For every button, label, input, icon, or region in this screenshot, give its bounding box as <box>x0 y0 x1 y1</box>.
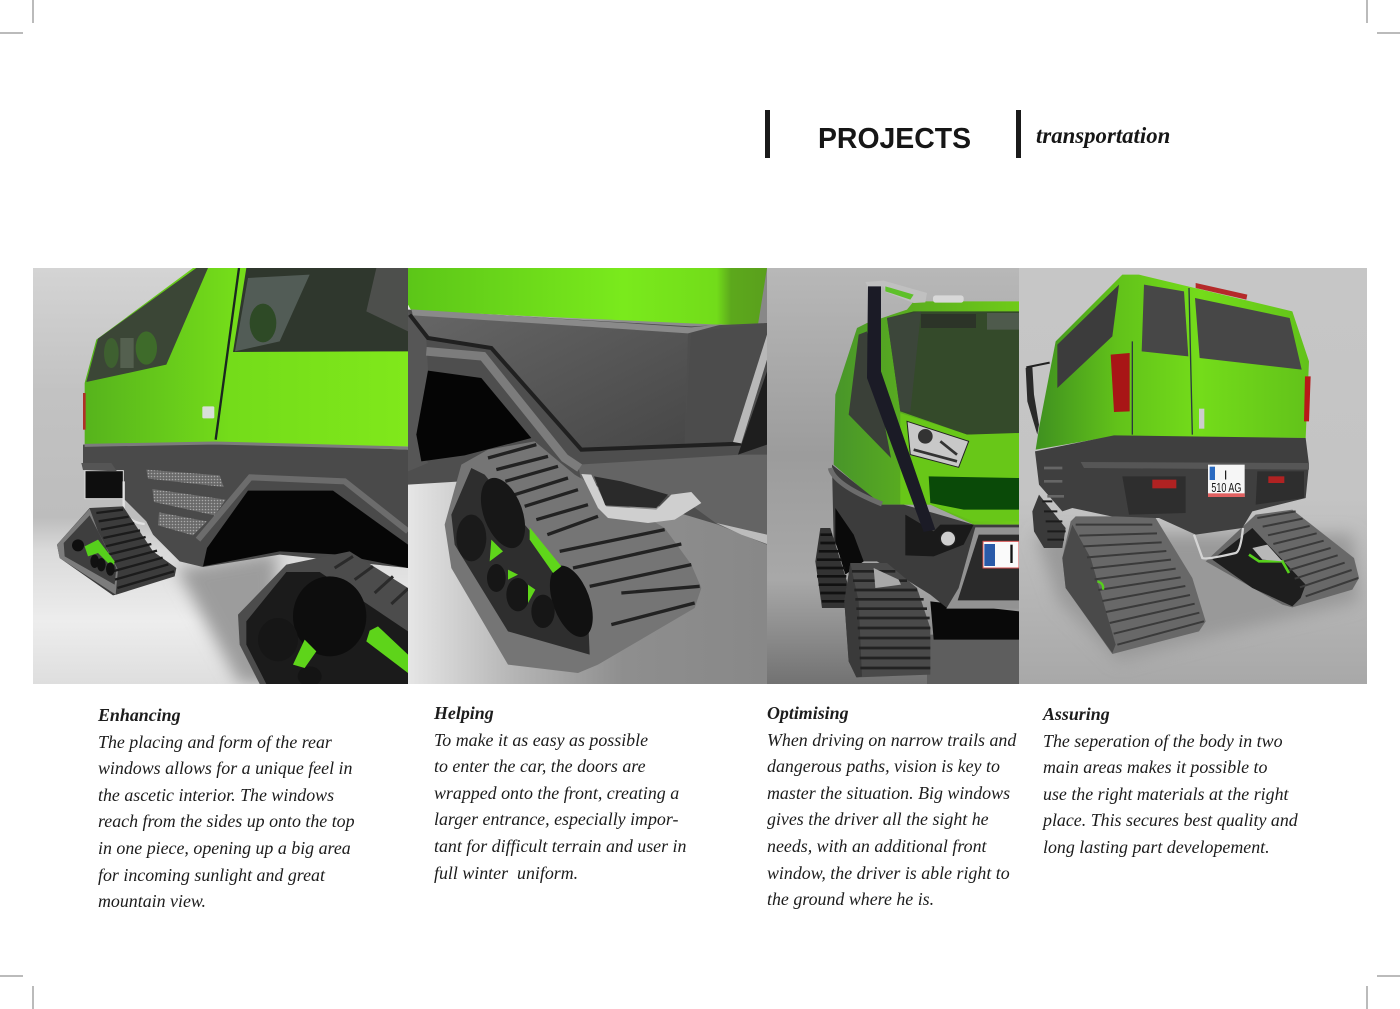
step handle <box>581 474 701 523</box>
side vents <box>146 470 226 535</box>
ground shadow <box>1036 535 1359 661</box>
photo: close-up of track and door step <box>408 268 767 684</box>
open door <box>1026 363 1050 435</box>
door window <box>233 268 408 352</box>
text block: Optimising: needs, with an additional front <box>767 836 986 856</box>
side window <box>849 331 891 458</box>
number plate with "510 AG": I <box>1224 468 1227 482</box>
text block: Optimising: When driving on narrow trails and <box>767 730 1016 750</box>
number plate with "510 AG": 510 AG <box>1211 481 1241 495</box>
licence plate frame <box>946 527 1019 609</box>
text block: Enhancing: in one piece, opening up a big area <box>98 838 351 858</box>
left track <box>1062 516 1206 654</box>
text block: Enhancing: the ascetic interior. The windows <box>98 785 334 805</box>
text block: Enhancing: mountain view. <box>98 891 206 911</box>
text block: Optimising: window, the driver is able right to <box>767 863 1010 883</box>
text block: Assuring: place. This secures best quality and <box>1043 810 1298 830</box>
text block: Optimising: Optimising <box>767 703 849 723</box>
rear track <box>57 506 176 595</box>
door seam <box>216 268 239 440</box>
green body <box>408 268 767 325</box>
grille opening <box>929 476 1019 510</box>
text block: Assuring: main areas makes it possible to <box>1043 757 1267 777</box>
far left track <box>1032 495 1066 548</box>
text block: Helping: wrapped onto the front, creating a <box>434 783 679 803</box>
windscreen <box>887 311 1019 435</box>
text block: Helping: larger entrance, especially impor- <box>434 809 678 829</box>
text block: Optimising: master the situation. Big windows <box>767 783 1010 803</box>
text block: Enhancing: The placing and form of the rear <box>98 732 332 752</box>
dark bumper <box>830 465 1019 608</box>
text block: Helping: tant for difficult terrain and user in <box>434 836 686 856</box>
text block: Enhancing: for incoming sunlight and great <box>98 865 325 885</box>
text block: Optimising: dangerous paths, vision is key to <box>767 756 1000 776</box>
wheel arch <box>416 371 531 461</box>
text block: Enhancing: Enhancing <box>98 705 181 725</box>
photo: front three-quarter view <box>767 268 1019 684</box>
front track <box>238 551 408 686</box>
text block: Helping: Helping <box>434 703 494 723</box>
text block: Optimising <box>767 703 1016 909</box>
headlight <box>907 421 969 467</box>
rear windows <box>86 268 208 382</box>
photo: rear view with open door <box>1019 268 1367 684</box>
snorkel <box>865 281 935 532</box>
text block: Enhancing: reach from the sides up onto the top <box>98 811 355 831</box>
text block: Assuring: Assuring <box>1043 704 1110 724</box>
photo: rear side view of tracked vehicle <box>33 268 408 686</box>
text block: Enhancing <box>98 705 355 911</box>
header bars <box>765 110 1021 158</box>
text block: Helping: to enter the car, the doors are <box>434 756 646 776</box>
dark lower body <box>83 442 408 568</box>
wheel arch <box>203 491 408 568</box>
text block: Helping <box>434 703 686 883</box>
dark body panel <box>408 309 767 545</box>
rear windows <box>1142 285 1302 370</box>
heading: transportation: transportation <box>1036 123 1170 148</box>
near track <box>844 563 930 677</box>
text block: Assuring: use the right materials at the right <box>1043 784 1288 804</box>
text block: Helping: full winter uniform. <box>434 863 578 883</box>
text block: Optimising: the ground where he is. <box>767 889 934 909</box>
green body side <box>85 268 408 446</box>
text block: Helping: To make it as easy as possible <box>434 730 648 750</box>
right track <box>1206 510 1359 607</box>
rear lamp box <box>81 463 123 499</box>
text block: Assuring: The seperation of the body in two <box>1043 731 1283 751</box>
text block: Optimising: gives the driver all the sight he <box>767 809 989 829</box>
far track <box>815 528 847 608</box>
track <box>445 441 701 673</box>
tail lights <box>1111 353 1311 421</box>
heading: PROJECTS: PROJECTS <box>818 123 971 155</box>
text block: Assuring: long lasting part developement. <box>1043 837 1270 857</box>
text block: Enhancing: windows allows for a unique feel in <box>98 758 352 778</box>
text block: Assuring <box>1042 704 1298 857</box>
green cab side <box>834 301 1019 525</box>
front panel <box>900 413 1019 521</box>
number plate with "510 AG" <box>1208 465 1245 497</box>
tow hitch <box>1194 528 1243 558</box>
green upper body <box>1036 275 1309 450</box>
side window <box>1057 285 1119 388</box>
dark lower body <box>1035 435 1309 535</box>
